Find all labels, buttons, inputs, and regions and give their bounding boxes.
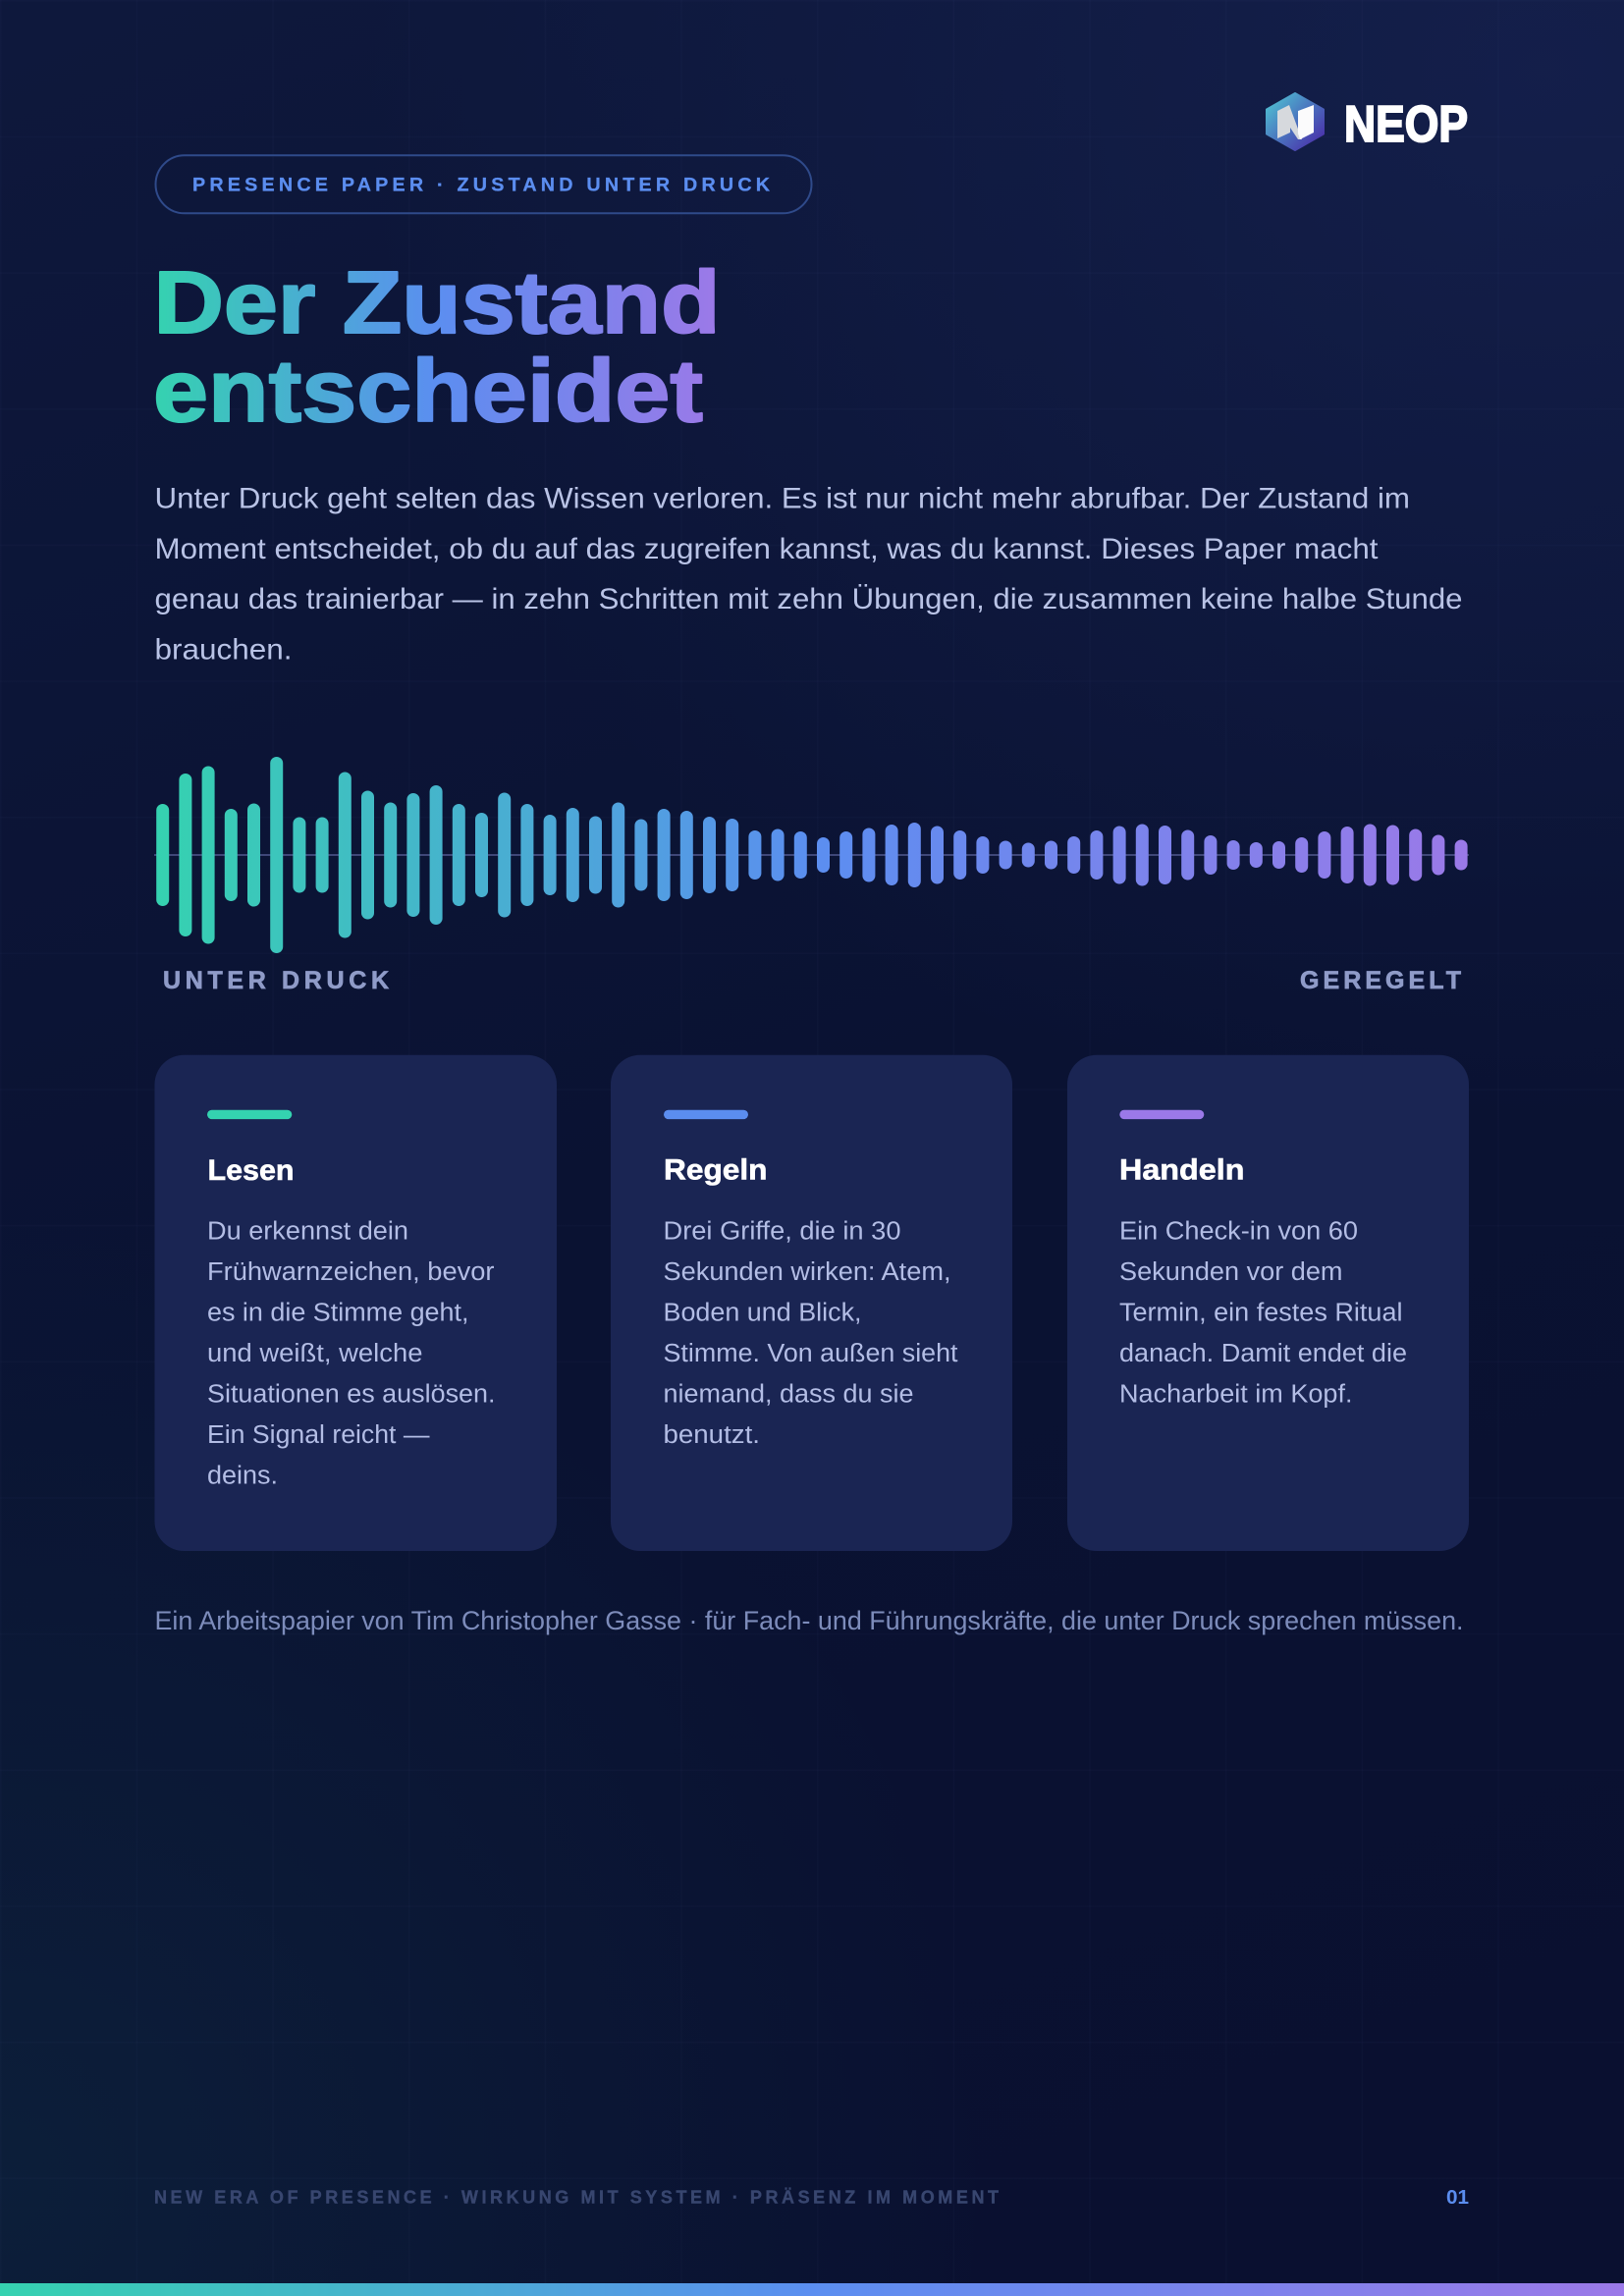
panel: Lesen <box>155 1055 557 1551</box>
intro paragraph: Moment entscheidet, ob du auf das zugreifen kannst, was du kannst. Dieses Paper macht <box>155 533 1379 565</box>
card heading: Regeln <box>664 1154 768 1187</box>
card body text: und weißt, welche <box>207 1340 422 1367</box>
card body text <box>664 1218 958 1449</box>
page number: 01 <box>1446 2187 1469 2209</box>
card heading: Handeln <box>1119 1154 1245 1187</box>
card body text: deins. <box>207 1463 278 1490</box>
card body text: Ein Check-in von 60 <box>1119 1218 1358 1246</box>
intro paragraph: Unter Druck geht selten das Wissen verloren. Es ist nur nicht mehr abrufbar. Der Zustand im <box>155 483 1410 515</box>
waveform label: left: UNTER DRUCK <box>163 967 389 994</box>
intro paragraph: brauchen. <box>155 634 293 666</box>
logo wordmark: NEOP <box>1344 96 1468 153</box>
icon: hexagon N mark <box>1267 93 1324 150</box>
bottom gradient bar <box>0 2283 1624 2296</box>
waveform label: right: GEREGELT <box>1300 967 1461 994</box>
title: entscheidet <box>153 343 703 441</box>
footer tagline: NEW ERA OF PRESENCE · WIRKUNG MIT SYSTEM · PRÄSENZ IM MOMENT <box>154 2187 999 2207</box>
card body text: Nacharbeit im Kopf. <box>1119 1381 1353 1409</box>
pill label <box>155 155 811 213</box>
card body text: es in die Stimme geht, <box>207 1300 469 1327</box>
card body text: Stimme. Von außen sieht <box>664 1340 958 1367</box>
card body text: Ein Signal reicht — <box>207 1421 430 1449</box>
card body text: Du erkennst dein <box>207 1218 408 1246</box>
panel: Handeln <box>1067 1055 1469 1551</box>
accent bar <box>207 1110 292 1119</box>
accent bar <box>1119 1110 1204 1119</box>
title: Der Zustand <box>153 254 721 352</box>
card body text <box>1119 1218 1407 1409</box>
card body text <box>207 1218 495 1490</box>
card body text: Boden und Blick, <box>664 1300 862 1327</box>
intro paragraph <box>155 483 1463 666</box>
card body text: Situationen es auslösen. <box>207 1381 495 1409</box>
card body text: niemand, dass du sie <box>664 1381 913 1409</box>
card heading: Lesen <box>208 1154 295 1187</box>
pill label: PRESENCE PAPER · ZUSTAND UNTER DRUCK <box>192 174 771 195</box>
card body text: Sekunden wirken: Atem, <box>664 1258 950 1286</box>
card body text: danach. Damit endet die <box>1119 1340 1407 1367</box>
card body text: Frühwarnzeichen, bevor <box>207 1258 495 1286</box>
accent bar <box>664 1110 748 1119</box>
card body text: benutzt. <box>664 1421 760 1449</box>
waveform chart <box>154 757 1469 953</box>
card body text: Sekunden vor dem <box>1119 1258 1343 1286</box>
panel: Regeln <box>611 1055 1012 1551</box>
author note: Ein Arbeitspapier von Tim Christopher Gasse · für Fach- und Führungskräfte, die unter Druck sprechen müssen. <box>155 1606 1463 1635</box>
card body text: Drei Griffe, die in 30 <box>664 1218 901 1246</box>
intro paragraph: genau das trainierbar — in zehn Schritten mit zehn Übungen, die zusammen keine halbe Stunde <box>155 583 1463 615</box>
logo: NEOP <box>1267 93 1468 153</box>
card body text: Termin, ein festes Ritual <box>1119 1300 1402 1327</box>
title <box>153 254 721 441</box>
